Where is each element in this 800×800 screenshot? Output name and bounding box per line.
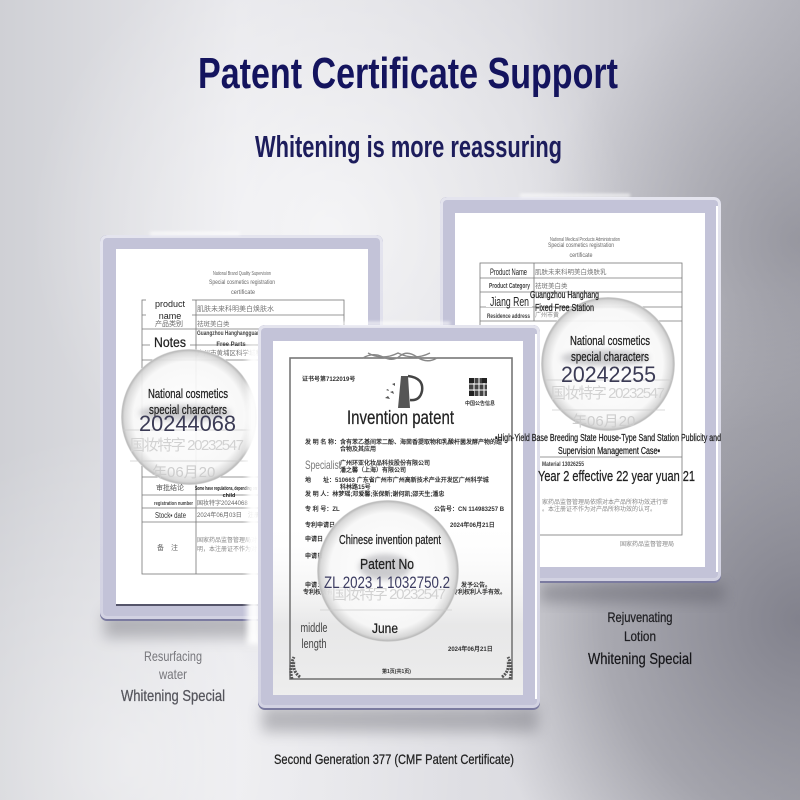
left certificate table text: 产品类别: [155, 319, 183, 328]
left certificate lower rows: 备 注: [157, 543, 178, 552]
left certificate table text: 广州市黄埔区科学城科: [197, 348, 262, 357]
patent details: 2024年06月21日: [450, 521, 495, 529]
right certificate table text: 广州市黄: [535, 311, 559, 319]
magnifier: center: June: [372, 620, 398, 636]
left certificate lower rows: 注册: [248, 511, 260, 519]
magnifier: right: 20242255: [561, 362, 656, 387]
left certificate heading: Special cosmetics registration: [209, 280, 275, 286]
left certificate table text: Notes: [154, 334, 186, 350]
patent details: 专利权所有: [303, 588, 333, 596]
label: middle length: length: [302, 636, 326, 651]
magnifier: center: [317, 500, 459, 642]
patent details: 潘之馨（上海）有限公司: [340, 466, 406, 474]
left certificate table text: name: [159, 311, 181, 321]
magnifier: right: special characters: [571, 349, 649, 364]
panel: center patent certificate: [258, 322, 540, 767]
patent details: 专利权利人手有效。: [452, 588, 506, 596]
left certificate table text: 祛斑美白类: [197, 319, 230, 328]
patent details: 发 明 名 称：含有苯乙基间苯二酚、海茴香提取物和乳酸杆菌发酵产物的组: [304, 438, 502, 446]
patent details: ，发予公告。: [455, 581, 491, 589]
right certificate caption: Rejuvenating: [608, 609, 672, 625]
left certificate table text: Free Parts: [216, 342, 246, 348]
magnifier: left: 年06月20: [152, 464, 215, 481]
certificate number: 证书号第7122019号: [302, 375, 355, 383]
left certificate heading: National Brand Quality Supervision: [213, 271, 271, 277]
left certificate table text: product: [155, 299, 186, 309]
patent details: 科林路15号: [340, 483, 371, 491]
center certificate caption: Second Generation 377 (CMF Patent Certificate): [274, 751, 514, 767]
panel: center patent certificate: 中国公告信息: [465, 400, 495, 407]
icon: patent emblem: [385, 376, 422, 408]
white glow beside center panel: [247, 345, 261, 645]
magnifier: right: 国妆特字 20232547: [551, 385, 665, 402]
right certificate table text: Fixed Free Station: [535, 303, 594, 314]
patent details: 合物及其应用: [340, 445, 376, 453]
left certificate lower rows: registration number: [154, 501, 194, 507]
right certificate heading: [548, 237, 620, 259]
magnifier: right: 年06月20: [572, 413, 635, 430]
icon: QR code: [469, 378, 487, 396]
patent details: 申请：: [305, 581, 323, 589]
left certificate table text: Guangzhou Hanghangguang: [197, 331, 263, 337]
right certificate notes: 国家药品监督管理局: [620, 540, 674, 548]
patent details: 广州环亚化妆品科技股份有限公司: [340, 459, 430, 467]
magnifier: left: special characters: [149, 402, 227, 417]
right certificate notes: [542, 498, 674, 548]
magnifier: center: 国妆特字 20232547: [332, 586, 446, 603]
patent details: 公告号：CN 114983257 B: [434, 505, 505, 513]
left certificate table text: 肌肤未来科明美白焕肤水: [197, 304, 274, 313]
patent details: 申请日: [305, 552, 323, 560]
magnifier: left: 20244068: [139, 411, 236, 436]
left certificate lower rows: 审批结论: [156, 483, 184, 492]
panel: left certificate: [100, 232, 383, 705]
patent details: 专利申请日: [305, 521, 335, 529]
overlay text: publicity case: Supervision Management Case▪: [558, 446, 660, 457]
left certificate lower rows: 国家药品监督管理局对: [197, 536, 257, 544]
right certificate heading: certificate: [570, 253, 593, 259]
left certificate caption: Whitening Special: [121, 688, 225, 705]
right certificate table text: Product Name: [490, 267, 527, 277]
left certificate lower rows: child: [223, 493, 235, 499]
left certificate caption: water: [158, 666, 187, 682]
left certificate table text: [146, 298, 274, 357]
left certificate lower rows: Stock▪ date: [155, 511, 186, 520]
right certificate caption: Lotion: [624, 628, 656, 644]
patent details: 申请日: [305, 535, 323, 543]
title: Patent Certificate Support: [198, 49, 618, 98]
patent details: [303, 438, 506, 675]
left certificate caption: Resurfacing: [144, 648, 202, 664]
magnifier: right: National cosmetics: [570, 333, 650, 348]
label: middle length: [300, 620, 328, 651]
left certificate lower rows: [154, 483, 263, 553]
right certificate caption: [588, 609, 692, 668]
magnifier: center: Chinese invention patent: [339, 532, 441, 547]
panel: right certificate: [440, 194, 724, 668]
magnifier: left: [121, 349, 257, 485]
left certificate lower rows: 明，本注册证不作为对: [197, 545, 257, 553]
label: middle length: middle: [300, 620, 328, 635]
subtitle: Whitening is more reassuring: [255, 129, 562, 164]
patent details: 专 利 号：ZL: [305, 505, 340, 513]
patent details: 2024年06月21日: [448, 645, 493, 653]
patent details: 发 明 人：林梦瑶;邓爱馨;张保新;谢何凯;邵天生;潘忠: [304, 490, 444, 498]
label: specialist: Specialist: [305, 458, 341, 472]
overlay text: publicity case: [495, 433, 721, 485]
right certificate table: [480, 263, 682, 535]
left certificate caption: [121, 648, 225, 705]
left certificate heading: [209, 271, 275, 296]
left certificate lower rows: 国妆特字20244068: [197, 499, 248, 507]
right certificate table text: Product Category: [489, 283, 530, 290]
magnifier: left: National cosmetics: [148, 386, 228, 401]
right certificate caption: Whitening Special: [588, 651, 692, 668]
right certificate table text: 肌肤未来科明美白焕肤乳: [535, 267, 607, 276]
right certificate table text: Jiang Ren: [490, 294, 529, 309]
ornament: [291, 353, 511, 679]
left certificate table: [142, 300, 344, 574]
right certificate heading: National Medical Products Administration: [550, 237, 620, 243]
right certificate notes: 。本注册证不作为对产品所称功效的认可。: [542, 505, 656, 513]
magnifier: right: [541, 297, 675, 431]
right certificate table text: Guangzhou Hanghang: [530, 290, 599, 301]
right certificate table text: Residence address: [487, 314, 531, 320]
magnifier: left: 国妆特字 20232547: [130, 437, 244, 454]
right certificate notes: 家药品监督管理局依照对本产品所称功效进行审: [542, 498, 668, 506]
left certificate lower rows: 2024年06月03日: [197, 511, 242, 519]
patent details: 第1页(共1页): [382, 668, 411, 675]
left certificate heading: certificate: [231, 290, 256, 296]
magnifier: center: Patent No: [360, 556, 414, 573]
overlay text: publicity case: Material 13026255: [542, 462, 585, 468]
overlay text: publicity case: Year 2 effective 22 year yuan 21: [538, 468, 695, 485]
heading: invention patent: Invention patent: [347, 408, 455, 429]
magnifier: center: ZL 2023 1 1032750.2: [324, 573, 450, 592]
right certificate heading: Special cosmetics registration: [548, 243, 614, 249]
right certificate table text: 祛斑美白类: [535, 281, 568, 290]
certificate border: [290, 358, 512, 679]
left certificate lower rows: Some have regulations, depending on the: [195, 486, 263, 492]
patent details: 地 址：510663 广东省广州市广州高新技术产业开发区广州科学城: [305, 476, 489, 484]
right certificate table text: [486, 267, 607, 320]
